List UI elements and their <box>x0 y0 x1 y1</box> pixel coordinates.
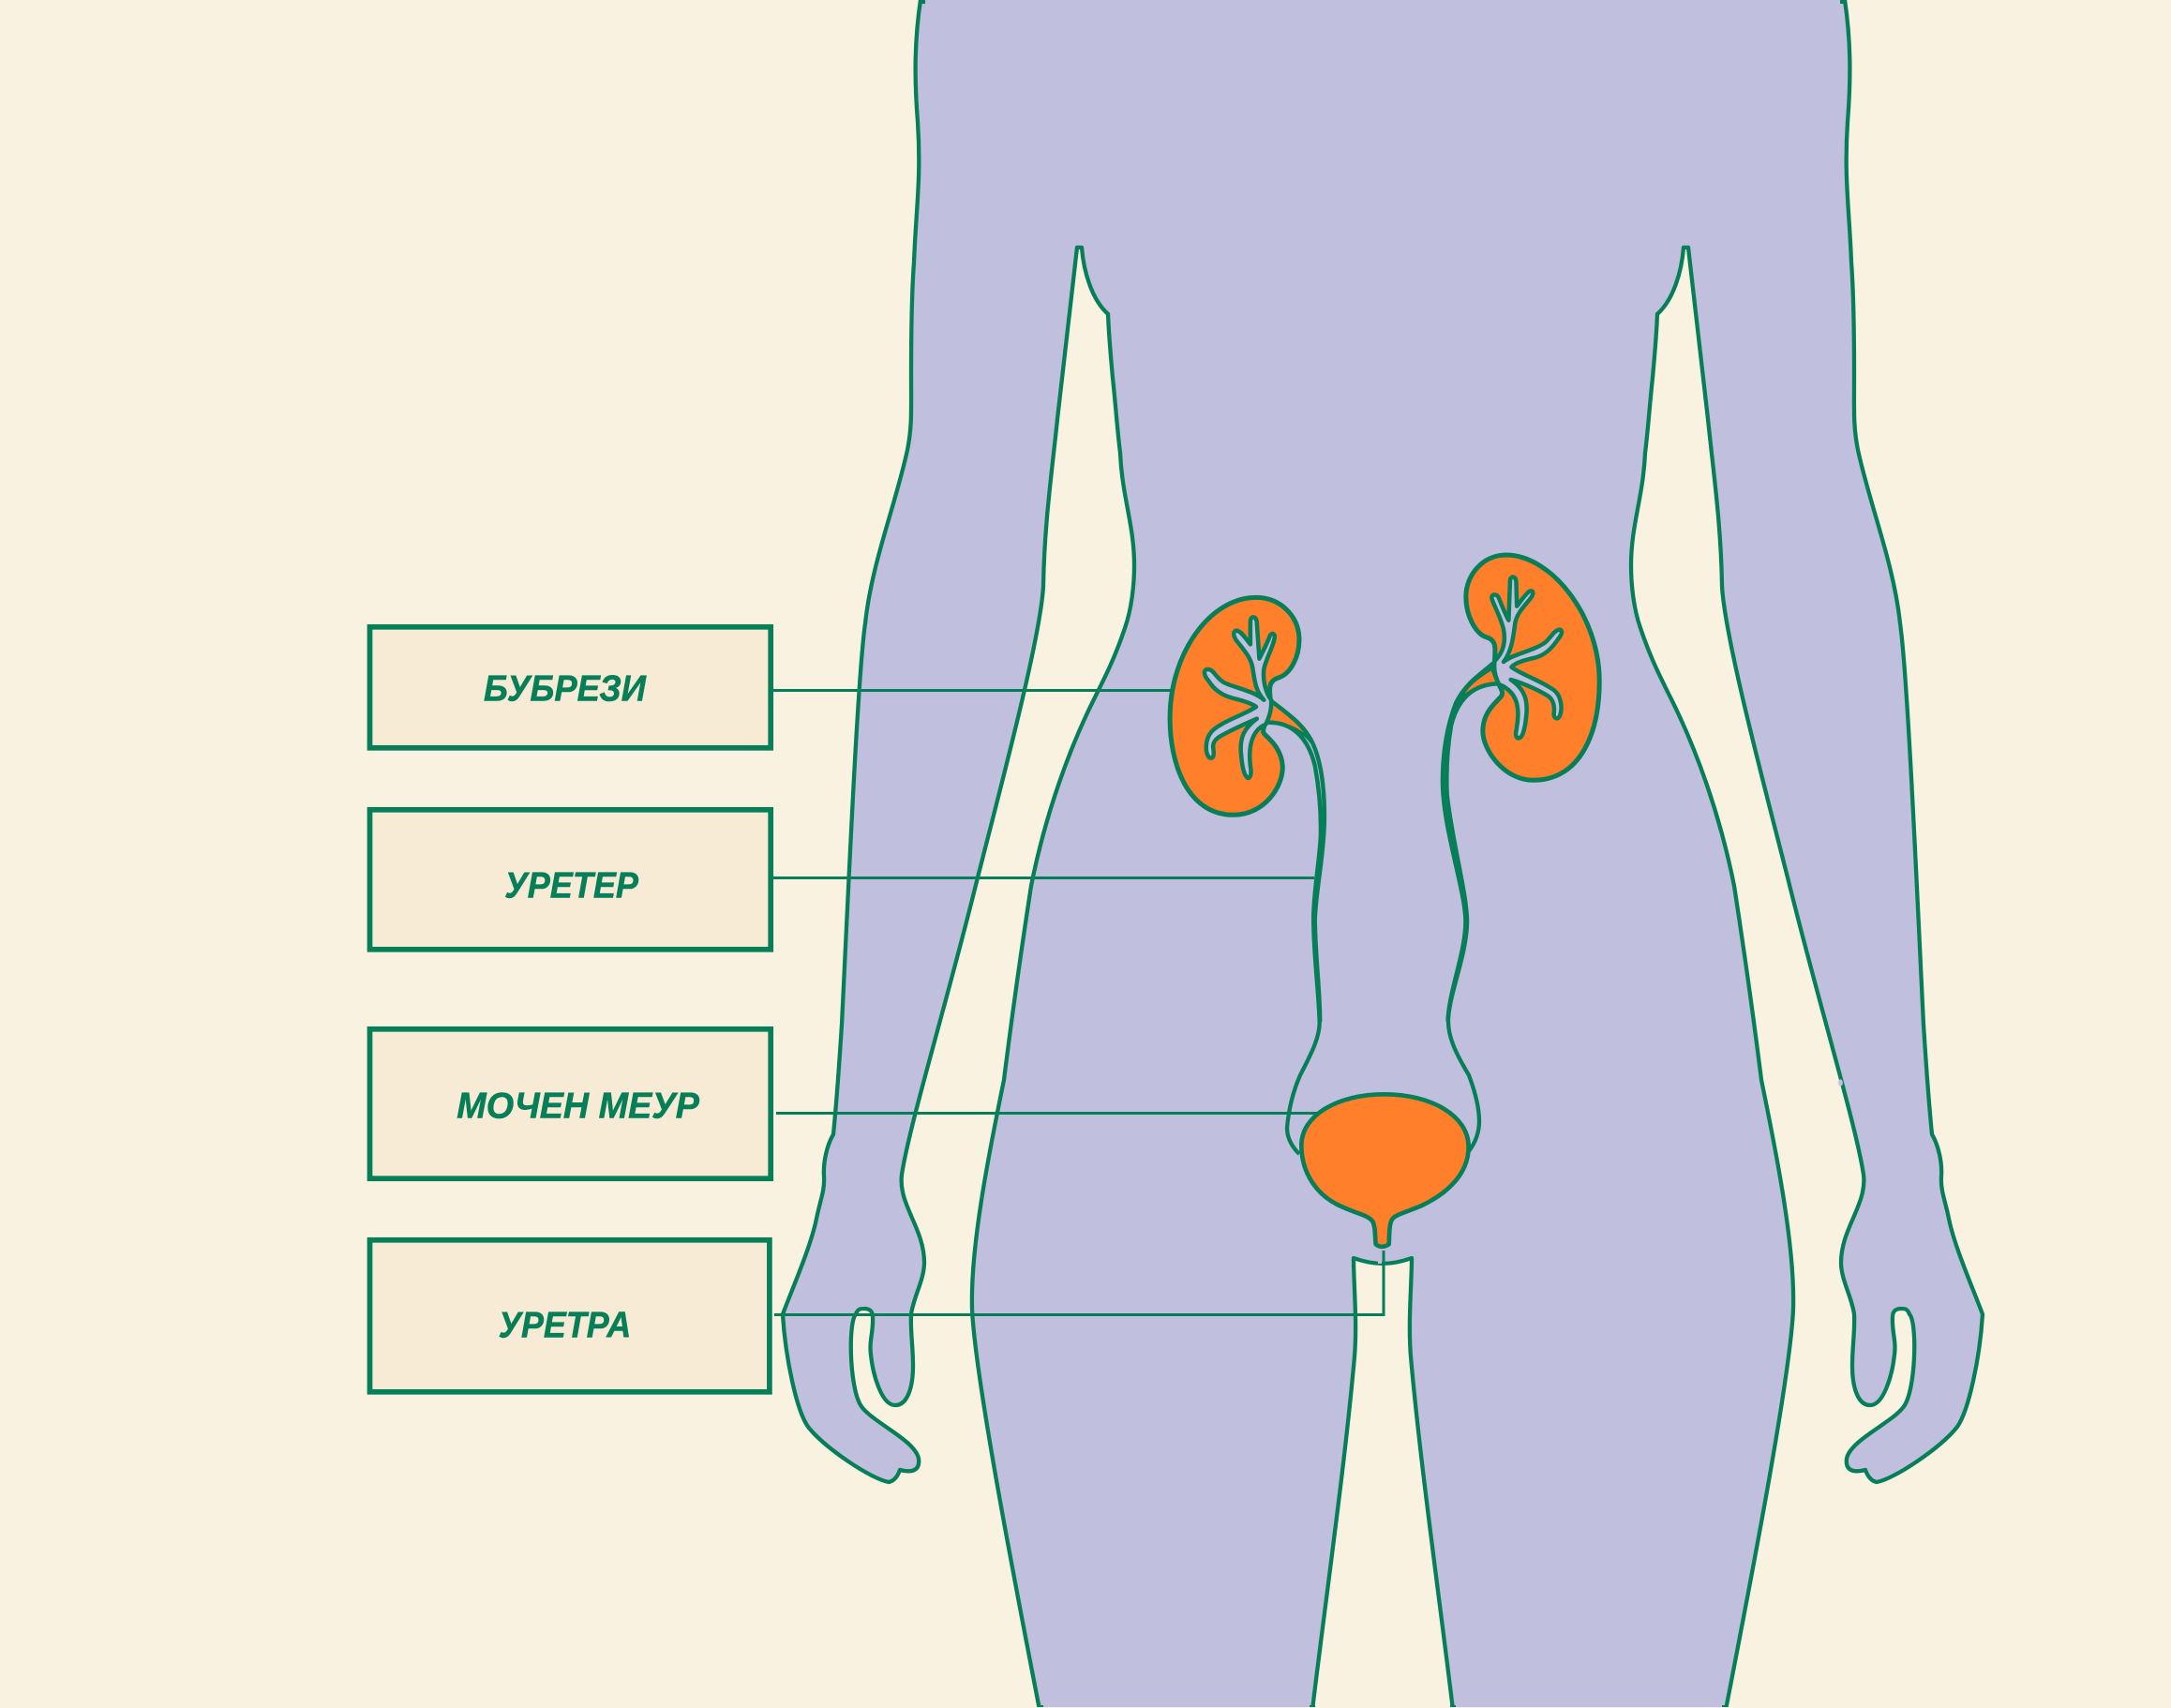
label: kidneys: БУБРЕЗИ <box>484 668 647 709</box>
label: ureter <box>369 810 771 950</box>
ureter wedge <box>1267 701 1314 747</box>
label: urethra <box>369 1240 770 1392</box>
kidney body <box>1170 597 1299 815</box>
label: ureter: УРЕТЕР <box>504 865 639 906</box>
body: left half <box>783 0 1387 1708</box>
leader: kidneys <box>773 689 1172 692</box>
right ureter lower part <box>1448 1020 1479 1151</box>
label: bladder: МОЧЕН МЕУР <box>457 1086 700 1127</box>
leader: urethra <box>774 1251 1385 1314</box>
left kidney and ureter <box>1170 597 1325 1022</box>
ureter wedge <box>1460 668 1497 701</box>
left ureter lower part <box>1287 1020 1320 1154</box>
leader: ureter <box>773 876 1314 879</box>
bladder <box>1301 1094 1469 1247</box>
label: kidneys <box>369 627 771 748</box>
ureter outer stroke <box>1443 663 1494 1022</box>
body: right half <box>1378 0 1983 1708</box>
ureter: lower left and right segments <box>1287 1020 1479 1154</box>
renal pelvis and calyces <box>1205 617 1275 778</box>
right kidney and ureter <box>1443 555 1599 1022</box>
leader lines <box>773 690 1385 1314</box>
ureter lower stroke <box>1267 723 1321 1022</box>
ureter inner stroke <box>1446 683 1499 1022</box>
ureter upper stroke <box>1272 701 1325 1022</box>
renal pelvis and calyces <box>1491 577 1562 738</box>
label: bladder <box>369 1029 771 1178</box>
leader: bladder <box>776 1112 1317 1115</box>
kidney body <box>1466 555 1599 780</box>
label: urethra: УРЕТРА <box>499 1306 631 1346</box>
